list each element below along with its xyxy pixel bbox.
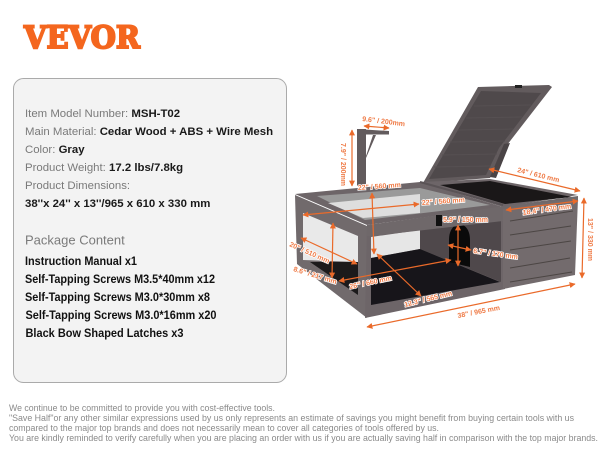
- glass top and interior: [295, 179, 578, 225]
- text block: package list: [25, 254, 217, 340]
- footer disclaimer: [9, 403, 598, 443]
- front opening: [365, 207, 505, 318]
- text block: package list: Black Bow Shaped Latches x3: [26, 326, 184, 340]
- latch: [436, 215, 442, 226]
- text block: product specs: Product Weight: 17.2 lbs/7.8kg: [25, 162, 183, 174]
- dimension arrows and labels: 26" / 660 mm: [349, 275, 392, 291]
- panel: specifications: [14, 78, 286, 382]
- text block: product specs: 38''x 24'' x 13''/965 x 610 x 330 mm: [25, 198, 210, 210]
- text block: product specs: Item Model Number: MSH-T02: [25, 108, 180, 120]
- right plank compartment: [503, 198, 578, 289]
- dimension arrows and labels: 7.9" / 200mm: [339, 143, 346, 186]
- dimension arrows and labels: 22" / 560 mm: [358, 182, 401, 192]
- text block: package list: Self-Tapping Screws M3.5*40mm x12: [25, 272, 215, 286]
- footer disclaimer: We continue to be committed to provide you with cost-effective tools.: [9, 403, 275, 413]
- dimension arrows and labels: 18.4" / 470 mm: [522, 203, 572, 217]
- front rail: [367, 196, 578, 236]
- footer disclaimer: "Save Half"or any other similar expressions used by us only represents an estimate of savings you might benefit from buying certain tools with us: [9, 413, 574, 423]
- dimension arrows and labels: 8.6" / 217 mm: [292, 266, 337, 286]
- text block: package list: Instruction Manual x1: [25, 254, 137, 268]
- text block: product specs: Main Material: Cedar Wood + ABS + Wire Mesh: [25, 126, 273, 138]
- text block: product specs: [25, 108, 273, 210]
- dimension arrows and labels: 6.7" / 170 mm: [473, 248, 518, 261]
- product: wooden enclosure: [288, 85, 593, 327]
- open lid: [423, 85, 552, 183]
- text block: package list: Self-Tapping Screws M3.0*30mm x8: [25, 290, 210, 304]
- footer disclaimer: You are kindly reminded to verify carefully when you are placing an order with us if you are actually saving half in comparison with the top major brands.: [9, 433, 598, 443]
- dimension arrows and labels: 5.9" / 150 mm: [443, 217, 488, 224]
- dimension arrows and labels: 38" / 965 mm: [457, 305, 501, 320]
- dimension arrows and labels: 24" / 610 mm: [517, 167, 560, 184]
- text block: product specs: Color: Gray: [25, 144, 85, 156]
- logo: VEVOR: VEVOR: [23, 20, 140, 56]
- dimension arrows and labels: 20" / 510 mm: [288, 241, 330, 265]
- dimension arrows and labels: 9.6" / 200mm: [362, 116, 405, 128]
- text block: product specs: Product Dimensions:: [25, 180, 130, 192]
- perch post: [357, 129, 389, 186]
- text block: package list: Self-Tapping Screws M3.0*16mm x20: [26, 308, 217, 322]
- dimension arrows and labels: 12.3" / 565 mm: [404, 290, 453, 309]
- heading: package content: Package Content: [25, 232, 125, 248]
- footer disclaimer: compared to the major top brands and does not necessarily mean to cover all categories of tools offered by us.: [9, 423, 439, 433]
- dimension arrows and labels: 13" / 330 mm: [586, 218, 593, 261]
- dimension arrows and labels: 22" / 560 mm: [422, 197, 465, 207]
- dimension arrows and labels: [288, 116, 593, 327]
- left side panel: [295, 195, 367, 318]
